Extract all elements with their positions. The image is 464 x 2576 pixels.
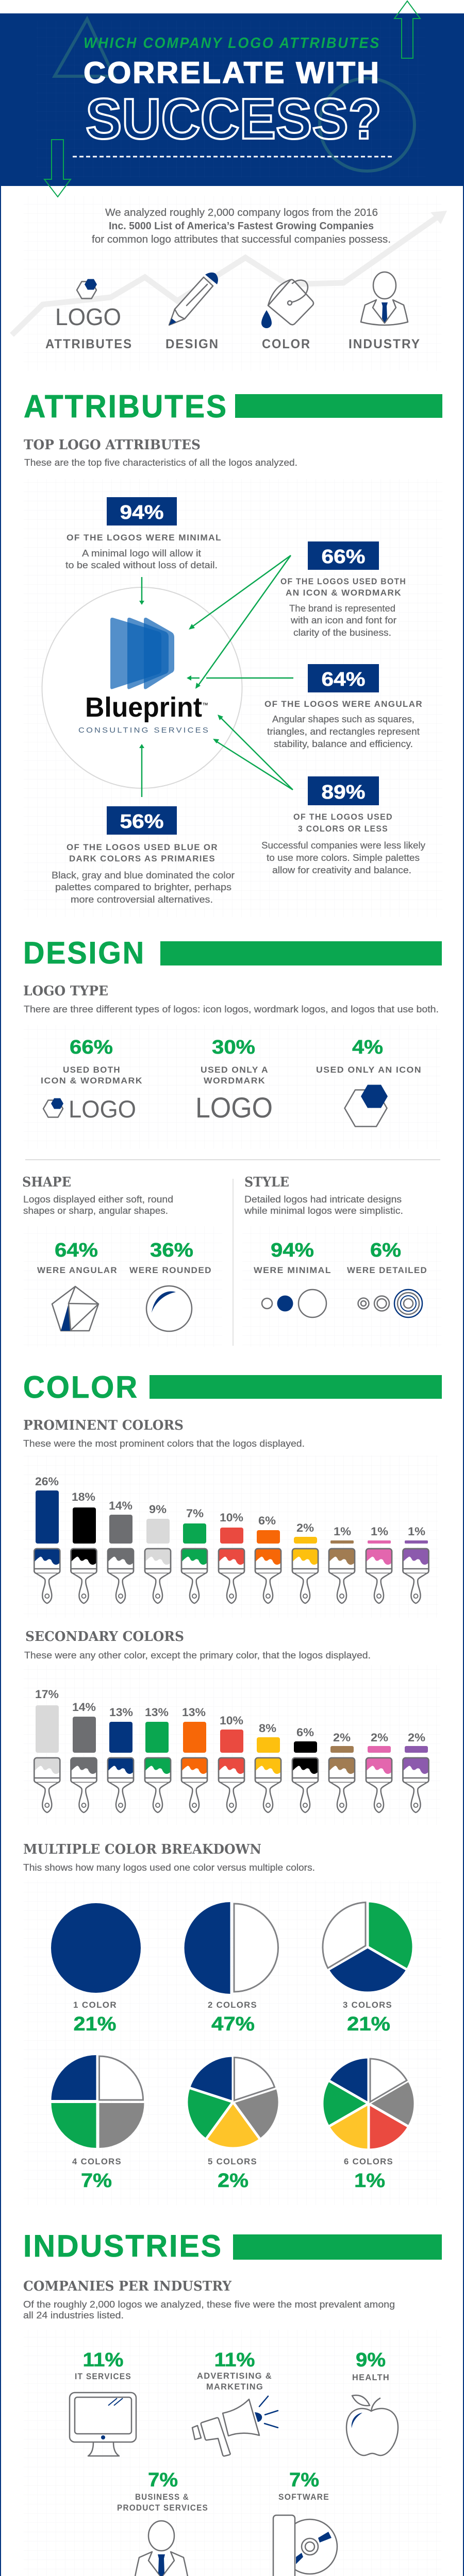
industry: health	[346, 2349, 398, 2455]
icon: logo attributes: LOGO	[55, 303, 121, 330]
stat: 94% minimal	[254, 1240, 332, 1317]
industry: software: 7%	[289, 2469, 319, 2491]
subheading: companies per industry: COMPANIES PER INDUSTRY	[23, 2279, 231, 2294]
bar: navy 26%	[34, 1475, 60, 1603]
stat: 6% detailed: 6%	[370, 1240, 401, 1261]
pie: 5 colors: 2%	[218, 2170, 248, 2192]
bar: navy 13%	[108, 1706, 134, 1812]
industry: business and product services	[117, 2469, 208, 2576]
bar: purple 2%: 2%	[408, 1731, 425, 1744]
subheading: logo type: LOGO TYPE	[23, 984, 108, 999]
pie: 6 colors: 1%	[354, 2170, 385, 2192]
bar: black 18%	[71, 1490, 97, 1603]
stat: 30% wordmark: LOGO	[195, 1091, 273, 1124]
bar: light gray 9%: 9%	[149, 1503, 167, 1516]
style heading: STYLE	[244, 1175, 289, 1190]
bar: pink 2%: 2%	[371, 1731, 388, 1744]
bar: light gray 9%	[145, 1503, 171, 1603]
blueprint logo	[78, 618, 210, 735]
subheading: companies per industry	[23, 2279, 395, 2320]
intro text: We analyzed roughly 2,000 company logos from the 2016	[105, 207, 378, 218]
bar: brown 1%: 1%	[334, 1525, 351, 1538]
intro text: Inc. 5000 List of America’s Fastest Growing Companies	[109, 221, 374, 232]
label: color: COLOR	[262, 337, 311, 351]
bar: purple 1%	[403, 1525, 429, 1603]
growth arrow background	[12, 211, 447, 335]
intro text: for common logo attributes that successful companies possess.	[92, 234, 391, 245]
stat: 4% icon	[316, 1037, 422, 1126]
subheading: top logo attributes: TOP LOGO ATTRIBUTES	[24, 437, 201, 453]
stat: 66% both: 66%	[70, 1037, 113, 1058]
stat: 30% wordmark: WORDMARK	[204, 1076, 266, 1086]
arrow: green down	[44, 140, 71, 197]
shape text: shapes or sharp, angular shapes.	[23, 1206, 168, 1216]
title line 3 outline: SUCCESS?	[86, 87, 382, 151]
bar: light gray 17%: 17%	[35, 1688, 59, 1701]
stat: 56% dark colors: OF THE LOGOS USED BLUE OR	[67, 842, 218, 852]
stat: 36% rounded	[129, 1240, 212, 1331]
stat: 89% three colors or less: 3 COLORS OR LESS	[298, 824, 388, 834]
bar: red 10%	[219, 1714, 244, 1812]
stat: 89% three colors or less	[261, 776, 425, 875]
bar: green 13%	[145, 1706, 171, 1812]
bar: green 7%	[181, 1507, 207, 1603]
bar: brown 2%: 2%	[333, 1731, 351, 1744]
section heading: color	[23, 1370, 442, 1404]
stat: 6% detailed	[347, 1240, 427, 1317]
intro panel	[12, 196, 447, 371]
stat: 66% icon and wordmark: with an icon and font for	[290, 615, 396, 625]
title line 2: CORRELATE WITH	[84, 56, 380, 90]
stat: 66% both: ICON & WORDMARK	[41, 1076, 143, 1086]
bar: navy 13%: 13%	[109, 1706, 133, 1719]
shape text: Logos displayed either soft, round	[23, 1194, 173, 1205]
industry: advertising and marketing: 11%	[214, 2349, 255, 2371]
bar: orange 6%	[255, 1514, 281, 1603]
arrow: green up	[394, 1, 420, 58]
arrows: 66% to logo	[189, 555, 291, 689]
subheading: top logo attributes: These are the top five characteristics of all the logos analyzed.	[24, 457, 297, 468]
stat: 64% angular: 64%	[322, 669, 365, 690]
arrow: 64% to logo	[187, 675, 293, 681]
stat: 89% three colors or less: to use more colors. Simple palettes	[267, 853, 420, 863]
icon: businessperson	[361, 272, 408, 325]
subheading: logo type: There are three different types of logos: icon logos, wordmark logos, and logos that use both.	[24, 1004, 439, 1014]
stat: 94% minimal	[65, 497, 222, 570]
icon: logo attributes	[55, 279, 121, 330]
bar: yellow 2%: 2%	[296, 1521, 314, 1534]
pie charts panel	[24, 1880, 441, 2205]
stat: 30% wordmark: USED ONLY A	[201, 1065, 269, 1075]
chart: secondary colors	[24, 1665, 440, 1825]
bar: pink 1%	[366, 1525, 392, 1603]
bar: red 10%	[219, 1511, 244, 1603]
bar: orange 6%: 6%	[258, 1514, 276, 1527]
blueprint logo: TM	[203, 703, 208, 706]
pie: 2 colors: 47%	[211, 2013, 255, 2035]
bar: brown 2%	[329, 1731, 355, 1812]
stat: 94% minimal: 94%	[120, 502, 164, 523]
intro text	[92, 207, 391, 245]
bar: brown 1%	[329, 1525, 355, 1603]
shape panel	[22, 1175, 222, 1347]
subheading: companies per industry: all 24 industries listed.	[23, 2310, 124, 2320]
blueprint logo: CONSULTING SERVICES	[78, 726, 210, 735]
bar: black 6%: 6%	[296, 1726, 314, 1739]
stat: 66% icon and wordmark: clarity of the business.	[293, 628, 391, 638]
bar: gray 14%: 14%	[109, 1499, 132, 1512]
industry: business and product services: PRODUCT SERVICES	[117, 2503, 208, 2513]
subheading: secondary colors: SECONDARY COLORS	[25, 1629, 184, 1645]
subheading: multiple color breakdown: This shows how many logos used one color versus multiple colors.	[23, 1862, 315, 1873]
subheading: prominent colors	[23, 1418, 305, 1449]
bar: red 10%: 10%	[220, 1511, 243, 1524]
stat: 66% both	[41, 1037, 143, 1123]
style text: while minimal logos were simplistic.	[244, 1206, 403, 1216]
arrow: 94% to logo	[139, 577, 144, 605]
industry: business and product services: BUSINESS &	[135, 2492, 189, 2502]
subheading: logo type	[23, 984, 439, 1014]
stat: 89% three colors or less: allow for creativity and balance.	[272, 865, 411, 875]
industry: software	[273, 2469, 337, 2576]
bar: purple 1%: 1%	[408, 1525, 425, 1538]
bar: gray 14%	[108, 1499, 134, 1603]
stat: 64% angular: OF THE LOGOS WERE ANGULAR	[264, 699, 423, 709]
stat: 36% rounded: WERE ROUNDED	[129, 1265, 212, 1275]
stat: 64% angular	[37, 1240, 118, 1331]
pie: 6 colors: 6 COLORS	[344, 2157, 393, 2166]
bar: gray 14%: 14%	[72, 1701, 96, 1714]
arrow: 56% to logo	[139, 744, 144, 797]
stat: 94% minimal: A minimal logo will allow it	[82, 548, 201, 558]
stat: 66% both: LOGO	[69, 1095, 136, 1123]
industry: advertising and marketing: ADVERTISING &	[197, 2371, 272, 2381]
pie: 4 colors: 4 COLORS	[72, 2157, 122, 2166]
pie: 3 colors	[323, 1901, 413, 2035]
stat: 56% dark colors: more controversial alternatives.	[71, 894, 213, 905]
stat: 66% icon and wordmark	[280, 541, 406, 638]
industry: IT services: IT SERVICES	[75, 2371, 131, 2381]
stat: 64% angular: triangles, and rectangles represent	[267, 726, 420, 737]
label: design: DESIGN	[165, 337, 219, 351]
bar: pink 2%	[366, 1731, 392, 1812]
stat: 56% dark colors: 56%	[120, 811, 164, 833]
industry: health: HEALTH	[352, 2372, 390, 2382]
section heading: color: COLOR	[23, 1370, 139, 1404]
bar: black 6%	[292, 1726, 318, 1812]
stat: 66% icon and wordmark: AN ICON & WORDMARK	[286, 588, 402, 598]
industry: advertising and marketing: MARKETING	[206, 2382, 263, 2392]
bar: gray 14%	[71, 1701, 97, 1812]
stat: 4% icon: 4%	[352, 1037, 383, 1058]
blueprint logo: Blueprint	[85, 692, 202, 723]
stat: 30% wordmark: 30%	[212, 1037, 255, 1058]
stat: 89% three colors or less: Successful companies were less likely	[261, 840, 425, 851]
shape heading: SHAPE	[22, 1175, 71, 1190]
pie: 3 colors: 21%	[347, 2013, 390, 2035]
bar: yellow 8%: 8%	[259, 1722, 276, 1735]
stat: 6% detailed: WERE DETAILED	[347, 1265, 427, 1275]
style text: Detailed logos had intricate designs	[244, 1194, 402, 1205]
stat: 36% rounded: 36%	[150, 1240, 193, 1261]
shape text	[23, 1194, 173, 1216]
pie: 5 colors: 5 COLORS	[208, 2157, 257, 2166]
section heading: attributes: ATTRIBUTES	[24, 389, 228, 425]
bar: green 7%: 7%	[186, 1507, 204, 1520]
section heading: attributes	[24, 389, 442, 425]
style panel	[242, 1175, 441, 1347]
subheading: multiple color breakdown: MULTIPLE COLOR BREAKDOWN	[23, 1842, 261, 1857]
industry: advertising and marketing	[192, 2349, 278, 2456]
stat: 64% angular: Angular shapes such as squares,	[272, 714, 415, 724]
label: attributes: ATTRIBUTES	[45, 337, 132, 351]
stat: 66% icon and wordmark: The brand is represented	[289, 603, 395, 614]
circle behind logo	[42, 587, 242, 788]
stat: 94% minimal: OF THE LOGOS WERE MINIMAL	[67, 533, 222, 543]
pie: 1 color: 1 COLOR	[73, 2000, 117, 2010]
stat: 56% dark colors: palettes compared to brighter, perhaps	[55, 882, 231, 892]
section heading: industries	[23, 2229, 442, 2263]
decorative circle	[320, 78, 415, 171]
label: industry: INDUSTRY	[349, 337, 421, 351]
pie: 1 color: 21%	[73, 2013, 117, 2035]
pie: 5 colors	[187, 2056, 279, 2192]
stat: 66% icon and wordmark: OF THE LOGOS USED BOTH	[280, 577, 406, 586]
stat: 94% minimal: to be scaled without loss of detail.	[65, 560, 218, 570]
stat: 89% three colors or less: OF THE LOGOS USED	[293, 812, 393, 822]
stat: 66% both: USED BOTH	[63, 1065, 121, 1075]
stat: 94% minimal: 94%	[271, 1240, 314, 1261]
pie: 1 color	[51, 1903, 141, 2035]
stat: 64% angular	[264, 664, 423, 749]
stat: 64% angular: 64%	[55, 1240, 98, 1261]
bar: purple 2%	[403, 1731, 429, 1812]
section heading: design: DESIGN	[23, 936, 145, 970]
subheading: prominent colors: These were the most prominent colors that the logos displayed.	[23, 1438, 305, 1449]
bar: yellow 2%	[292, 1521, 318, 1603]
bar: navy 26%: 26%	[35, 1475, 59, 1488]
bar: green 13%: 13%	[145, 1706, 169, 1719]
icon: paint bucket	[261, 280, 313, 328]
industry: IT services	[70, 2349, 136, 2456]
stat: 64% angular: stability, balance and efficiency.	[274, 739, 413, 749]
title line 1: WHICH COMPANY LOGO ATTRIBUTES	[84, 35, 380, 52]
pie: 3 colors: 3 COLORS	[343, 2000, 392, 2010]
bar: yellow 8%	[255, 1722, 281, 1812]
stat: 66% icon and wordmark: 66%	[322, 546, 365, 568]
bar: orange 13%	[181, 1706, 207, 1812]
attributes diagram	[24, 479, 442, 917]
pie: 2 colors	[185, 1902, 278, 2035]
chart: prominent colors	[24, 1455, 438, 1618]
stat: 4% icon: USED ONLY AN ICON	[316, 1065, 422, 1075]
bar: pink 1%: 1%	[371, 1525, 388, 1538]
style text	[244, 1194, 403, 1216]
industry: software: SOFTWARE	[278, 2492, 329, 2502]
stat: 56% dark colors: DARK COLORS AS PRIMARIES	[69, 854, 216, 863]
bar: red 10%: 10%	[220, 1714, 243, 1727]
industries panel	[24, 2330, 441, 2576]
bar: black 18%: 18%	[72, 1490, 95, 1503]
stat: 30% wordmark	[195, 1037, 273, 1124]
decorative triangle	[55, 19, 114, 76]
pie: 4 colors	[52, 2055, 144, 2192]
section heading: design	[23, 936, 442, 970]
subheading: companies per industry: Of the roughly 2,000 logos we analyzed, these five were the most prevalent among	[23, 2299, 395, 2310]
stat: 89% three colors or less: 89%	[322, 782, 365, 803]
header banner	[0, 13, 464, 186]
section heading: industries: INDUSTRIES	[23, 2229, 223, 2263]
stat: 94% minimal: WERE MINIMAL	[254, 1265, 332, 1275]
bar: orange 13%: 13%	[182, 1706, 206, 1719]
icon: pencil	[169, 273, 218, 325]
subheading: secondary colors	[24, 1629, 371, 1660]
pie: 2 colors: 2 COLORS	[208, 2000, 257, 2010]
industry: IT services: 11%	[82, 2349, 124, 2371]
subheading: prominent colors: PROMINENT COLORS	[23, 1418, 184, 1433]
stat: 56% dark colors: Black, gray and blue dominated the color	[52, 870, 235, 880]
bar: light gray 17%	[34, 1688, 60, 1812]
pie: 4 colors: 7%	[81, 2170, 112, 2192]
stat: 56% dark colors	[52, 806, 235, 905]
arrows: 89% to logo	[213, 715, 293, 790]
stat: 64% angular: WERE ANGULAR	[37, 1265, 118, 1275]
industry: health: 9%	[356, 2349, 386, 2371]
subheading: secondary colors: These were any other color, except the primary color, that the logos displayed.	[24, 1650, 371, 1660]
pie: 6 colors	[322, 2057, 415, 2192]
subheading: top logo attributes	[24, 437, 297, 468]
logo type panel	[24, 1025, 440, 1149]
industry: business and product services: 7%	[148, 2469, 178, 2491]
subheading: multiple color breakdown	[23, 1842, 315, 1873]
